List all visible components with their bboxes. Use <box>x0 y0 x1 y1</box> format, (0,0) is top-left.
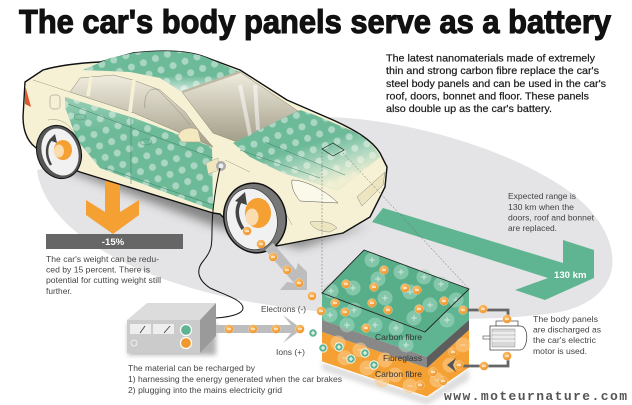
weight text <box>46 254 161 296</box>
range text: doors, roof and bonnet <box>508 212 595 222</box>
range text: are replaced. <box>508 223 557 233</box>
green charge circles <box>322 252 464 352</box>
weight text: potential for cutting weight still <box>46 275 161 285</box>
battery block <box>322 250 470 405</box>
recharge text: 2) plugging into the mains electricity grid <box>128 385 282 395</box>
bonnet panel <box>233 110 380 190</box>
weight bar: -15% <box>102 237 125 248</box>
intro text: The latest nanomaterials made of extremely <box>386 54 596 64</box>
side windows <box>70 75 213 147</box>
wire arrowhead <box>447 358 456 372</box>
mirror <box>178 128 201 142</box>
rear wheel <box>30 120 88 184</box>
range value: 130 km <box>554 270 587 281</box>
weight bar <box>46 234 183 249</box>
motor text: the car's electric <box>533 335 597 345</box>
battery layer labels <box>375 332 422 379</box>
battery layer labels: Carbon fibre <box>375 369 422 379</box>
recharge text <box>128 363 342 395</box>
dashed guide lines <box>322 152 469 293</box>
car <box>23 51 387 259</box>
windscreen <box>182 72 298 142</box>
car shadow <box>40 160 370 248</box>
intro text: thin and strong carbon fibre replace the car's <box>386 66 599 77</box>
lower vent <box>310 221 337 232</box>
cable <box>199 168 243 318</box>
motor text: are discharged as <box>533 324 601 334</box>
charger box <box>127 303 216 355</box>
watermark: www.moteurnature.com <box>444 389 627 404</box>
electrons label: Electrons (-) <box>261 304 306 314</box>
grille <box>357 172 385 206</box>
weight text: ced by 15 percent. There is <box>46 264 150 274</box>
front wheel <box>216 177 294 259</box>
rear light <box>25 85 31 107</box>
motor wires <box>458 310 508 366</box>
recharge text: 1) harnessing the energy generated when the car brakes <box>128 374 342 384</box>
intro text: also double up as the car's battery. <box>386 104 552 115</box>
green range arrow <box>372 208 594 300</box>
ions <box>309 329 378 369</box>
lower grey arrow <box>216 315 302 343</box>
charging port <box>206 158 226 174</box>
battery layer labels: Carbon fibre <box>375 332 422 342</box>
motor text <box>533 314 601 356</box>
ions label: Ions (+) <box>276 347 305 357</box>
car body <box>23 51 387 250</box>
motor text: The body panels <box>533 314 598 324</box>
weight text: further. <box>46 286 72 296</box>
roof panel <box>83 51 240 92</box>
recharge text: The material can be recharged by <box>128 363 256 373</box>
weight arrow <box>86 176 139 234</box>
intro text: steel body panels and can be used in the car's <box>386 79 606 90</box>
weight text: The car's weight can be redu- <box>46 254 159 264</box>
fuel flap <box>50 95 60 109</box>
intro text: roof, doors, bonnet and floor. These panels <box>386 92 589 102</box>
electrons <box>225 227 511 389</box>
intro text <box>386 54 606 115</box>
range text: Expected range is <box>508 191 576 201</box>
orange charge circles <box>330 336 470 394</box>
grey ground ellipse <box>37 117 612 319</box>
range text: 130 km when the <box>508 202 574 212</box>
motor text: motor is used. <box>533 346 587 356</box>
range text <box>508 191 595 233</box>
electric motor <box>483 321 527 350</box>
door panels <box>65 97 213 210</box>
battery layer labels: Fibreglass <box>383 353 422 363</box>
headlight <box>292 180 338 203</box>
upper grey arrow <box>265 243 307 290</box>
